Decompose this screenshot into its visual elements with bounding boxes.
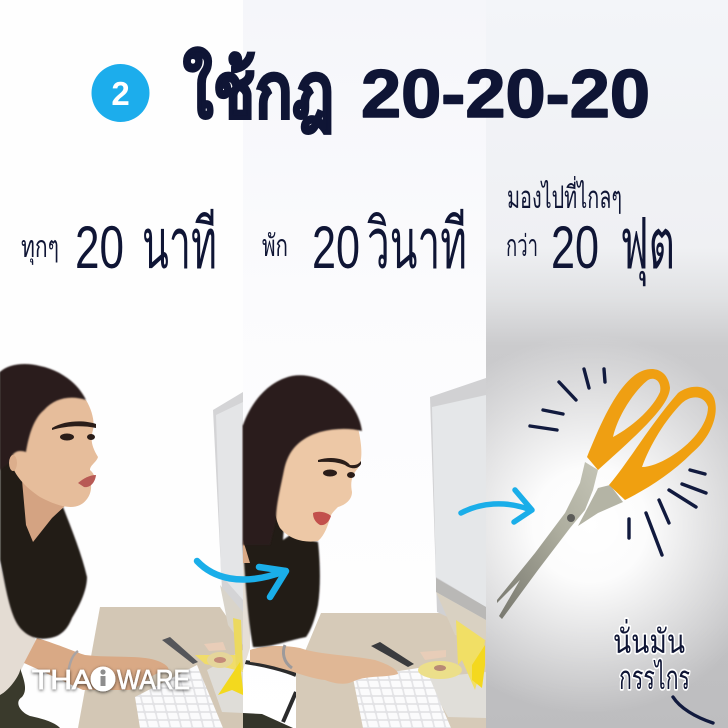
top hair [0,364,86,470]
sticky notes and tape [418,620,485,690]
arm and hand [250,646,398,684]
desk [296,613,486,728]
blades [497,462,623,619]
title [92,47,650,134]
step 1 caption: every 20 minutes: 20 [75,214,124,281]
step 2 caption: rest 20 seconds: พัก [262,230,288,263]
number badge: 2 [111,75,130,112]
neck sliver [243,540,250,563]
smiling mouth [313,512,331,525]
top and torso [0,565,36,695]
back hair [0,372,87,639]
handwritten note: that's scissors: นั่นมัน [613,619,685,660]
photo: woman excited looking at the computer [243,375,486,728]
keyboard [353,667,451,728]
arrow: from first to second photo [197,561,286,597]
bracelet [283,645,292,668]
scissors illustration [497,369,716,619]
step 2 caption: rest 20 seconds [262,205,467,283]
step 1 caption: every 20 minutes: นาที [142,205,217,283]
step 2 caption: rest 20 seconds: 20 [312,214,360,281]
step 3 caption: look further than 20 feet [506,176,675,287]
back hair [243,425,320,647]
step 3 caption: look further than 20 feet: ฟุต [620,205,675,287]
arm and hand [24,638,168,690]
step 3 caption: look further than 20 feet: มองไปที่ไกลๆ [507,176,622,215]
logo: THAIWARE: WARE [117,664,190,695]
logo: THAIWARE: THA [32,664,92,695]
keyboard [135,665,223,728]
handwritten note: that's scissors: กรรไกร [619,659,690,696]
eyebrow and eye [52,421,96,440]
face [274,427,361,542]
top hair [243,375,362,545]
pen tray [162,637,198,664]
step 2 caption: rest 20 seconds: วินาที [367,205,467,283]
top [243,560,250,670]
orange handles [587,369,670,470]
step 1 caption: every 20 minutes [21,205,217,283]
chair frame [245,662,296,722]
pants [0,668,60,728]
monitor [426,378,486,718]
pants [243,713,293,728]
emphasis dashes around scissors [530,369,706,555]
panel: every 20 minutes background [0,0,243,728]
title thai text: ใช้กฎ [183,47,334,134]
ear [9,455,17,471]
eyebrow and eyes [318,458,361,478]
number badge [92,64,150,122]
panel: look far background [486,0,728,728]
panel: rest 20 seconds background [243,0,486,728]
pen tray [371,642,414,667]
monitor [207,392,243,713]
logo: THAIWARE [32,664,190,695]
bracelet [68,651,78,675]
step 3 caption: look further than 20 feet: กว่า [506,230,538,263]
step 1 caption: every 20 minutes: ทุกๆ [21,231,59,266]
arrow: from second photo to scissors [461,490,532,522]
sticky notes [195,618,243,695]
desk [78,607,243,728]
handwritten note: that's scissors [613,619,713,723]
lips [78,475,96,487]
title numbers: 20-20-20 [361,56,650,132]
face [11,393,98,507]
photo: woman concentrating at the computer [0,364,243,728]
step 3 caption: look further than 20 feet: 20 [551,214,599,281]
neck [22,480,66,542]
